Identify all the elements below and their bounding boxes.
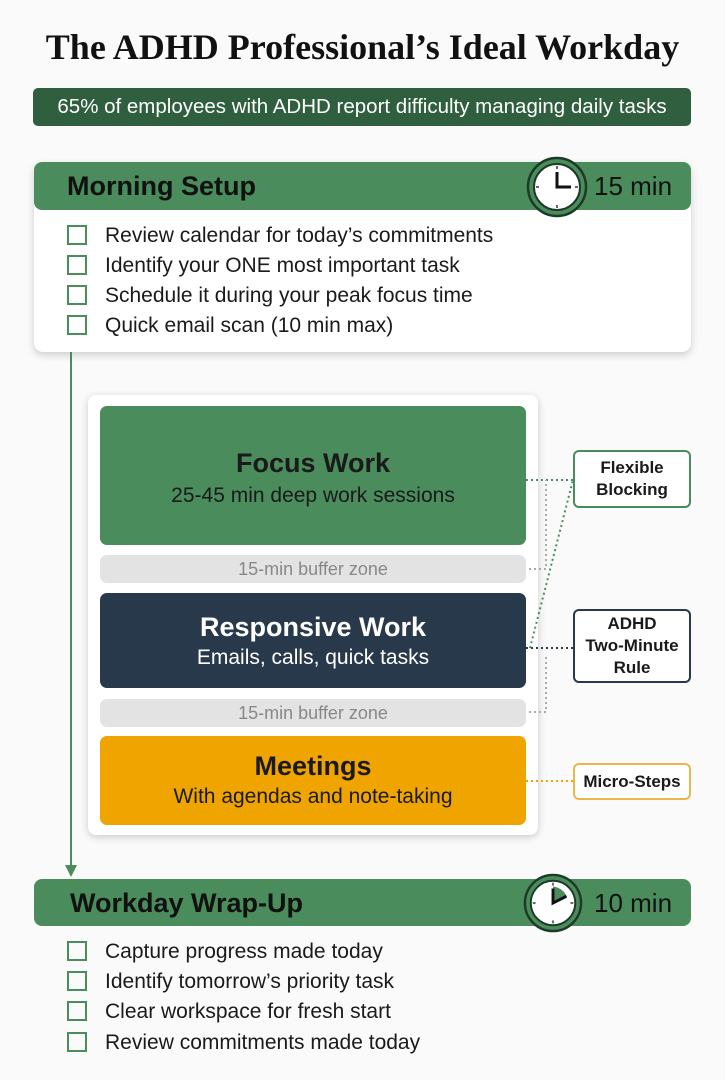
checklist: morning: Schedule it during your peak focus time [105,284,473,307]
connectors [526,479,573,782]
label: two-minute rule: Rule [614,658,650,677]
stat banner [33,88,691,126]
label: two-minute rule: Two-Minute [585,636,679,655]
label: two-minute rule: ADHD [607,614,657,633]
checklist: wrap-up [67,940,420,1054]
checklist: wrap-up: Identify tomorrow’s priority task [105,970,394,993]
block: meetings [100,736,526,825]
label: micro-steps: Micro-Steps [583,772,681,790]
arrow: timeline [65,352,77,877]
buffer 2: 15-min buffer zone [238,703,388,723]
checklist: wrap-up: Capture progress made today [105,940,383,963]
title: The ADHD Professional’s Ideal Workday [46,27,679,67]
block: focus work [100,406,526,545]
morning header [34,162,691,210]
label: micro-steps [573,763,691,800]
label: flexible blocking: Blocking [596,480,668,499]
block: focus work: Focus Work [236,448,390,478]
icon: clock [524,874,582,932]
checklist: morning [67,224,493,337]
panel: work blocks [88,395,538,835]
block: focus work: 25-45 min deep work sessions [171,484,455,507]
label: flexible blocking: Flexible [600,458,664,477]
buffer 1: 15-min buffer zone [238,559,388,579]
checklist: wrap-up: Clear workspace for fresh start [105,1000,391,1023]
buffer 2 [100,699,526,727]
label: flexible blocking [573,450,691,508]
panel: morning setup [34,162,691,352]
panel: wrap-up header [34,879,691,926]
stat banner: 65% of employees with ADHD report difficulty managing daily tasks [57,95,667,118]
block: responsive work: Responsive Work [200,612,426,642]
morning header: Morning Setup [67,171,256,201]
block: meetings: With agendas and note-taking [173,785,453,808]
icon: clock [526,156,588,218]
block: meetings: Meetings [254,751,372,781]
morning header: 15 min [594,171,672,201]
block: responsive work: Emails, calls, quick tasks [197,646,429,669]
block: responsive work [100,593,526,688]
checklist: wrap-up: Review commitments made today [105,1031,420,1054]
panel: wrap-up header: 10 min [594,888,672,918]
label: two-minute rule [573,609,691,683]
buffer 1 [100,555,526,583]
checklist: morning: Review calendar for today’s commitments [105,224,493,247]
checklist: morning: Quick email scan (10 min max) [105,314,393,337]
checklist: morning: Identify your ONE most important task [105,254,460,277]
panel: wrap-up header: Workday Wrap-Up [70,888,303,918]
